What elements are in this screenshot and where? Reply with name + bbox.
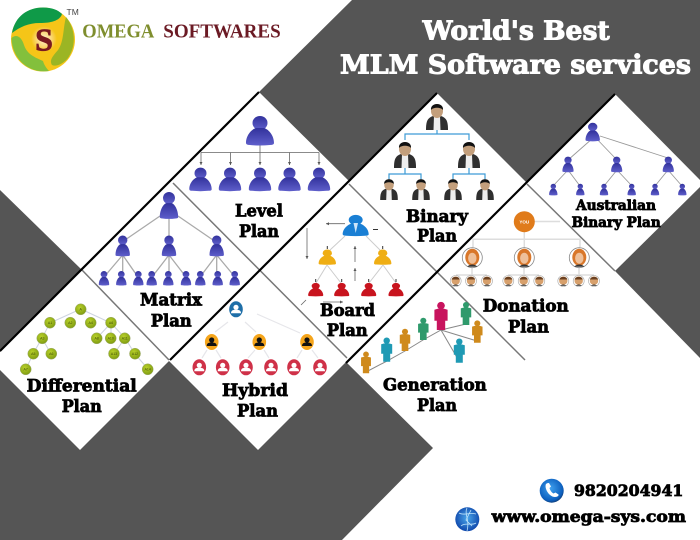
donation plan tree: YOU xyxy=(519,220,529,224)
australian binary label: Australian xyxy=(575,198,656,214)
differential plan label xyxy=(27,377,137,417)
matrix plan label: Plan xyxy=(151,312,192,332)
gray background: right triangle xyxy=(615,187,700,358)
gray background: bottom xyxy=(0,361,433,540)
differential plan tree: A13 xyxy=(111,352,117,356)
board plan label: Plan xyxy=(327,321,368,341)
logo xyxy=(11,7,281,72)
differential plan tree: A14 xyxy=(145,368,151,372)
differential plan tree: A2 xyxy=(68,321,72,325)
gray background: top right xyxy=(259,0,700,182)
level plan tree xyxy=(189,116,330,191)
donation plan label: Donation xyxy=(483,297,569,317)
panel: differential plan xyxy=(20,304,153,417)
title: MLM Software services xyxy=(340,50,691,80)
phone number: 9820204941 xyxy=(574,481,683,500)
differential plan tree: A7 xyxy=(24,368,28,372)
panel: donation plan xyxy=(450,211,600,337)
board plan tree xyxy=(301,215,404,305)
differential plan tree: A4 xyxy=(89,321,93,325)
differential plan tree: A5 xyxy=(31,352,35,356)
differential plan tree: A6 xyxy=(49,352,53,356)
donation plan tree xyxy=(450,211,600,286)
level plan label: Level xyxy=(235,202,284,222)
differential plan label: Plan xyxy=(62,397,102,417)
contact: website xyxy=(455,507,686,531)
differential plan tree: A3 xyxy=(40,336,44,340)
panel: binary plan xyxy=(380,104,494,247)
logo emblem xyxy=(11,8,75,72)
panel: generation plan xyxy=(361,302,487,416)
panel: australian binary plan xyxy=(549,123,686,231)
board plan label: Board xyxy=(320,301,375,321)
binary plan tree xyxy=(380,104,494,200)
icon: globe xyxy=(455,507,479,531)
hybrid plan label: Hybrid xyxy=(222,381,288,401)
australian binary label xyxy=(572,198,661,231)
australian binary label: Binary Plan xyxy=(572,215,661,231)
matrix plan label xyxy=(140,291,203,332)
gray background: left triangle xyxy=(0,190,82,352)
donation plan label: Plan xyxy=(508,317,549,337)
binary plan label xyxy=(406,207,469,247)
level plan label xyxy=(235,202,284,242)
differential plan tree: A xyxy=(80,308,83,312)
panel: hybrid plan xyxy=(192,301,327,422)
differential plan tree: A12 xyxy=(132,352,138,356)
matrix plan label: Matrix xyxy=(140,291,203,311)
differential plan tree: A8 xyxy=(95,336,99,340)
generation plan label: Generation xyxy=(383,376,487,396)
logo emblem: S xyxy=(35,22,53,58)
hybrid plan tree xyxy=(192,301,327,375)
generation plan label xyxy=(383,376,487,416)
hybrid plan label: Plan xyxy=(237,402,278,422)
hybrid plan label xyxy=(222,381,288,422)
panel: matrix plan xyxy=(99,192,240,332)
title: World's Best xyxy=(422,16,610,46)
trademark: TM xyxy=(66,7,79,17)
company name: OMEGA xyxy=(82,20,155,42)
panel: board plan xyxy=(301,215,404,341)
differential plan tree: A10 xyxy=(108,336,114,340)
australian binary tree xyxy=(549,123,686,195)
website address: www.omega-sys.com xyxy=(491,507,686,526)
matrix plan tree xyxy=(99,192,240,286)
contact: phone xyxy=(540,479,683,503)
differential plan label: Differential xyxy=(27,377,137,397)
binary plan label: Binary xyxy=(406,207,469,227)
level plan label: Plan xyxy=(239,222,279,242)
board plan label xyxy=(320,301,375,341)
binary plan label: Plan xyxy=(417,227,457,247)
panel: level plan xyxy=(189,116,330,242)
differential plan tree: A1 xyxy=(48,321,52,325)
donation plan label xyxy=(483,297,569,337)
title xyxy=(340,16,691,80)
differential plan tree: A6 xyxy=(109,321,113,325)
differential plan tree: A11 xyxy=(122,336,128,340)
company name: SOFTWARES xyxy=(163,20,281,42)
generation plan network xyxy=(361,302,483,373)
icon: phone xyxy=(540,479,564,503)
company name xyxy=(82,20,281,42)
generation plan label: Plan xyxy=(417,396,457,416)
differential plan tree xyxy=(20,304,153,375)
